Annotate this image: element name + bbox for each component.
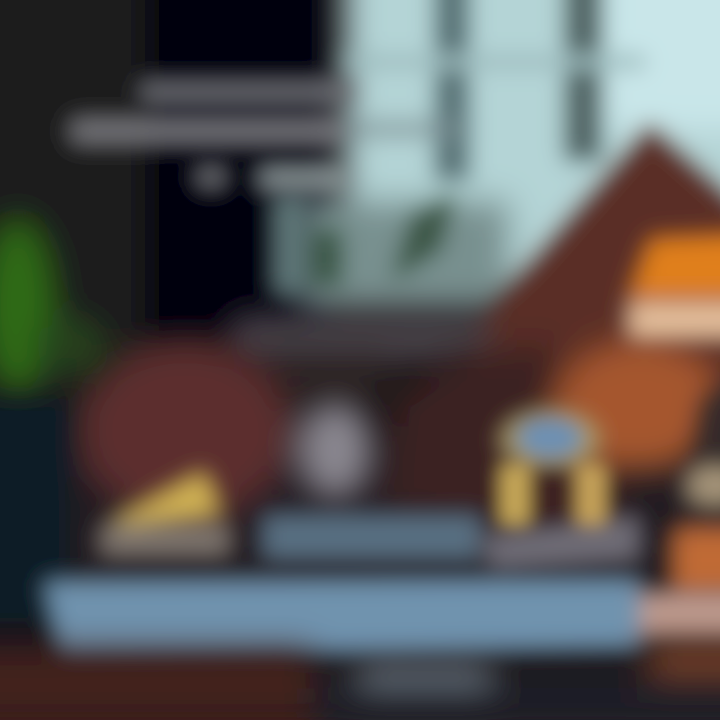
orange lamp <box>628 232 720 338</box>
background: bright window <box>300 0 720 310</box>
window frames <box>272 0 645 295</box>
table top <box>42 578 720 656</box>
plant <box>0 217 108 393</box>
blue tray <box>262 514 482 560</box>
title line 3 <box>196 166 226 188</box>
blurred title block <box>70 80 465 190</box>
plant pot <box>0 400 68 625</box>
arch: right pillar <box>576 465 606 525</box>
arch: halo <box>500 410 600 470</box>
right edge: laptop strip and orange <box>665 340 720 620</box>
mountain-shaped roof <box>470 125 720 420</box>
wood table foreground <box>0 645 720 720</box>
arch: base <box>480 515 640 570</box>
title line 2 <box>70 118 345 144</box>
background: dark wall <box>0 0 330 440</box>
arch icon <box>480 410 640 570</box>
arch: left pillar <box>500 465 530 525</box>
gold object in hand <box>100 470 230 556</box>
desk area and person <box>0 315 720 580</box>
brown shoulder <box>385 340 720 530</box>
arch: dark opening <box>538 468 564 518</box>
hand <box>77 340 371 520</box>
title line 1 <box>140 80 355 104</box>
arch: blue dome <box>518 419 582 457</box>
